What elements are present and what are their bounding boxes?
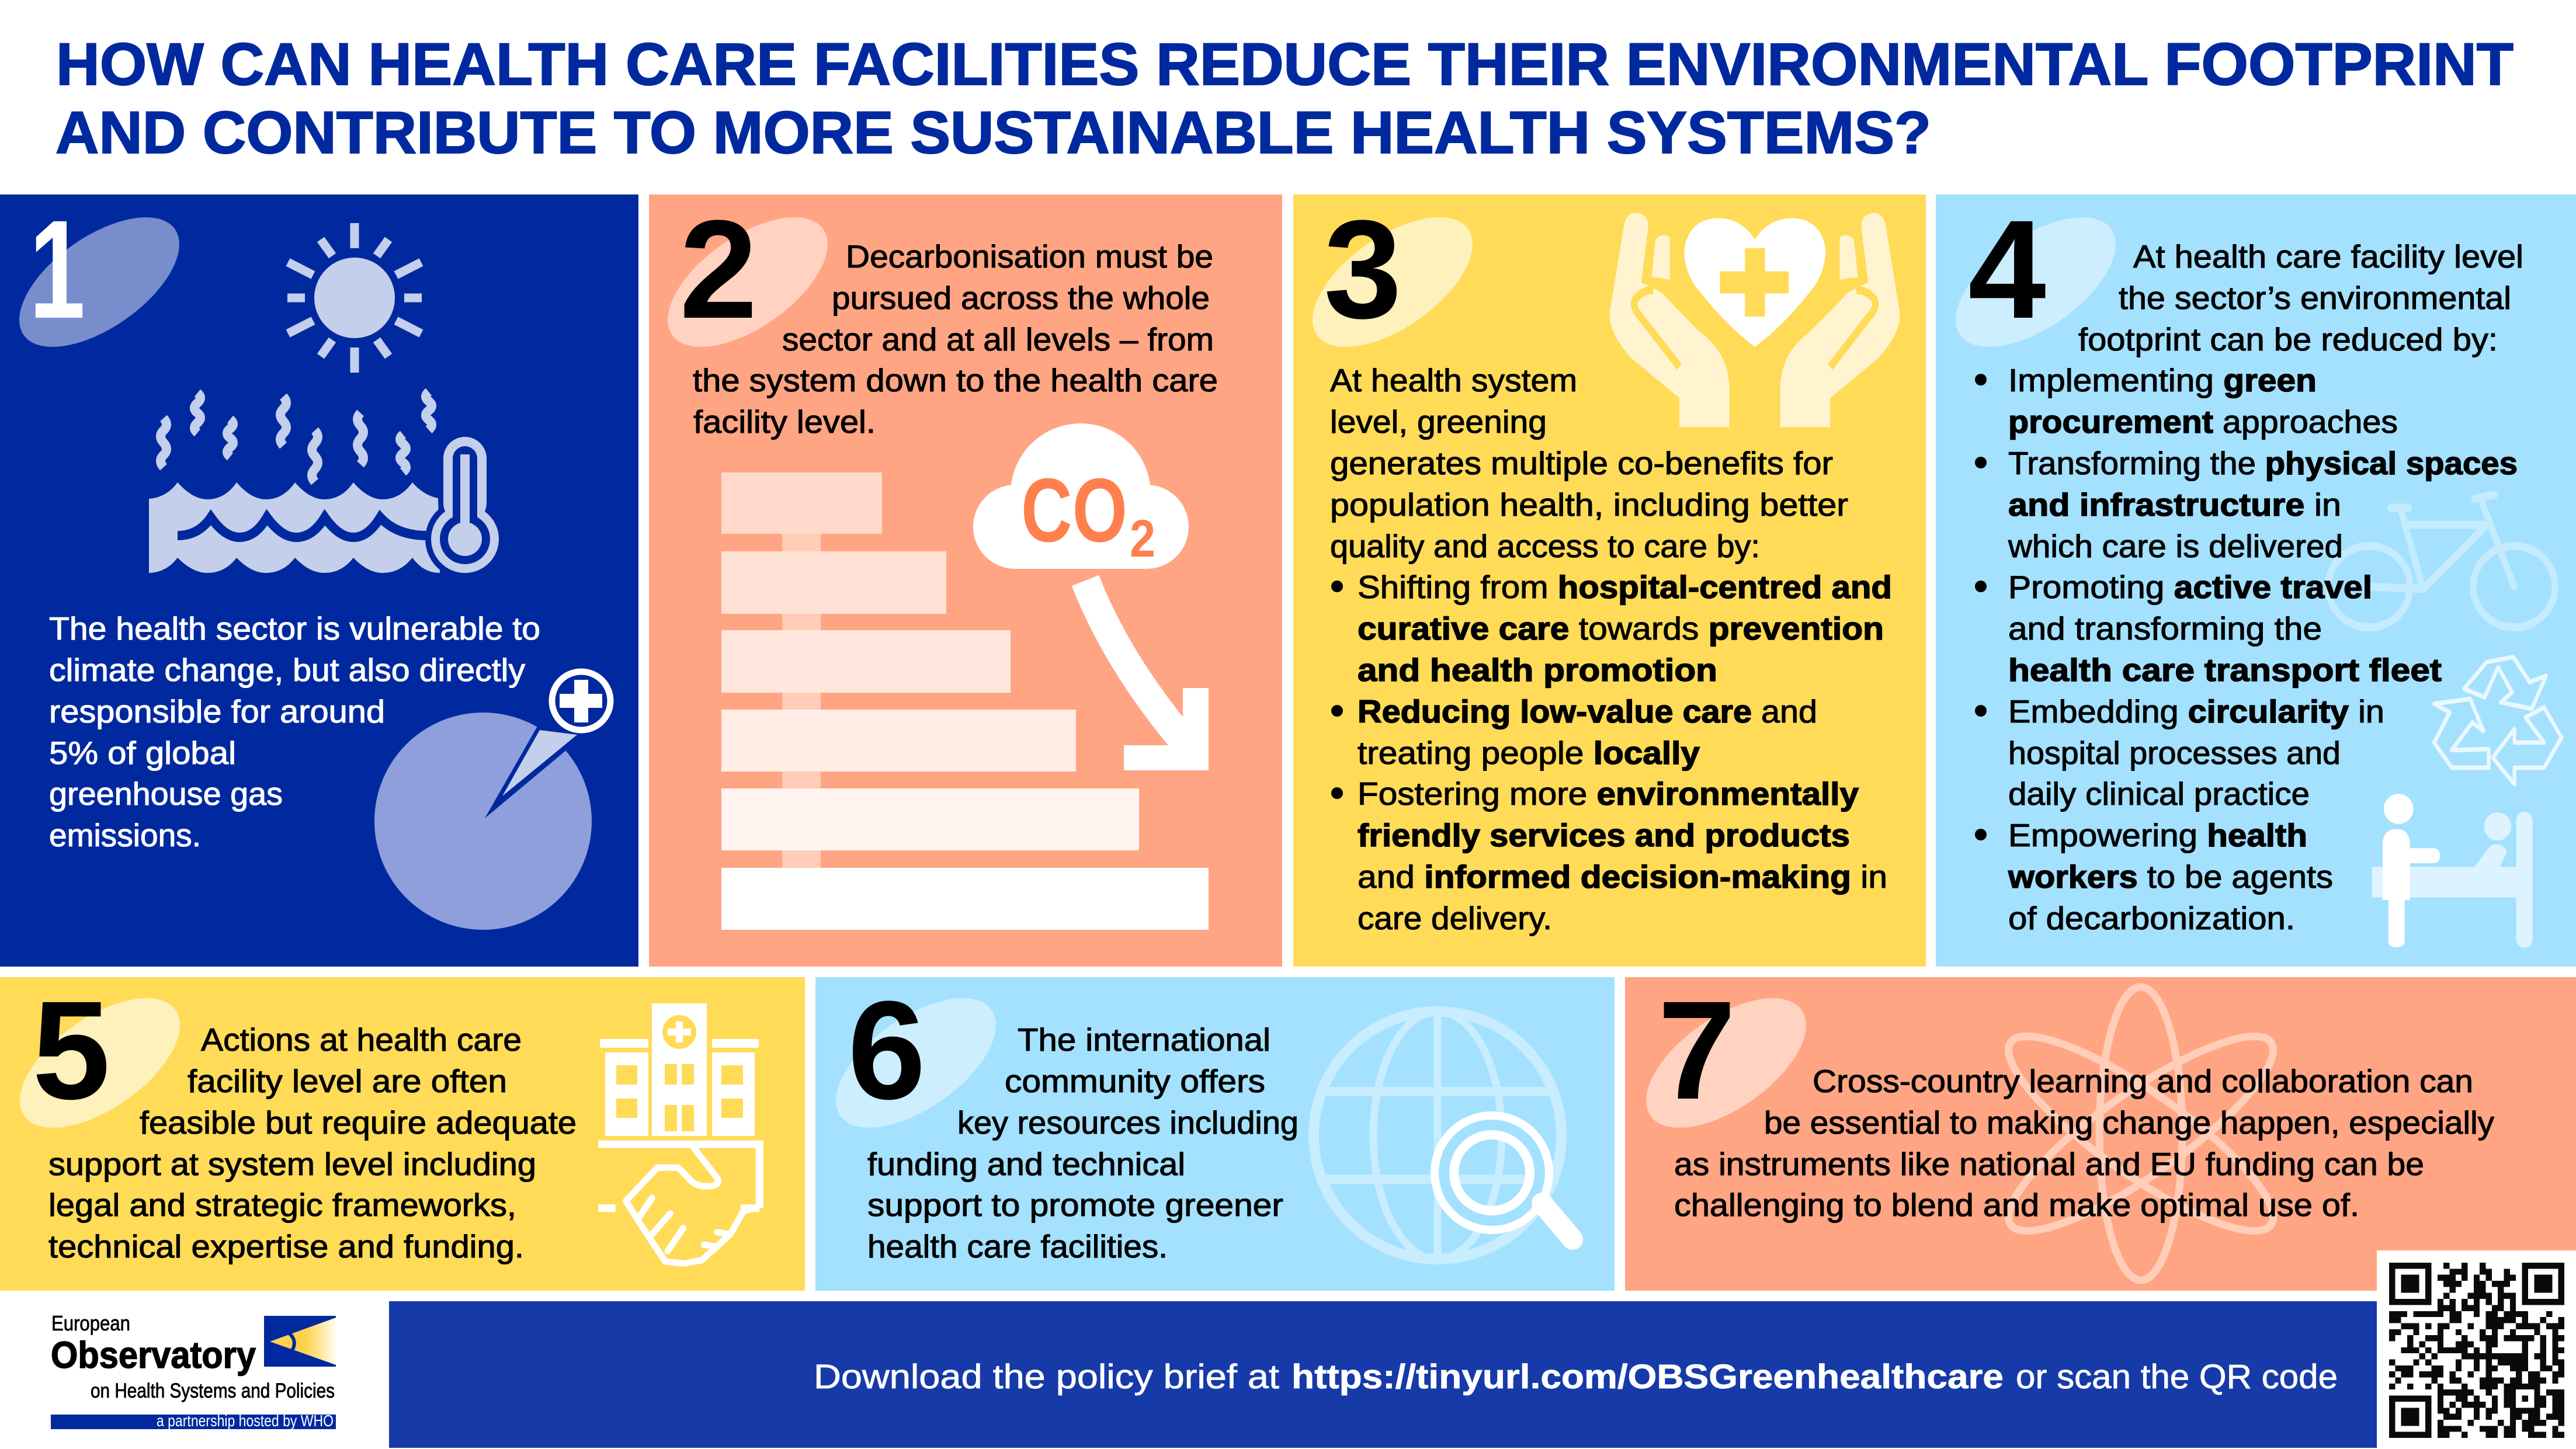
icon: hospital: [600, 1003, 759, 1136]
text: panel 4: daily clinical practice: [2008, 776, 2310, 812]
text: panel 3: Fostering more environmentally: [1358, 776, 1859, 812]
text: panel 3: At health system: [1330, 362, 1577, 398]
panel 5: system level support: [0, 972, 805, 1291]
text: panel 2: the system down to the health care: [693, 362, 1218, 398]
text: panel 5: legal and strategic frameworks,: [48, 1187, 516, 1223]
text: panel 3: Shifting from hospital-centred and: [1358, 569, 1892, 605]
text: panel 4: At health care facility level: [2133, 238, 2523, 274]
text: panel 4: the sector’s environmental: [2119, 280, 2511, 316]
footer bar: download call to action: Download the policy brief at: [814, 1358, 1279, 1396]
text: panel 5: facility level are often: [188, 1063, 507, 1099]
text: panel 2: facility level.: [693, 404, 876, 440]
icon: bicycle: [2328, 495, 2555, 627]
footer bar: download call to action: [389, 1301, 2377, 1448]
text: panel 3: level, greening: [1330, 404, 1547, 440]
icon: hands holding heart: [1610, 213, 1900, 428]
number 4: [1934, 191, 2137, 373]
text: panel 5: support at system level including: [48, 1146, 536, 1182]
text: panel 3: Reducing low-value care and: [1358, 693, 1817, 729]
text: panel 3: generates multiple co-benefits for: [1330, 445, 1833, 481]
logo: European Observatory: European: [51, 1311, 130, 1335]
title: AND CONTRIBUTE TO MORE SUSTAINABLE HEALTH SYSTEMS?: [55, 99, 1931, 166]
text: panel 1: 5% of global: [49, 735, 236, 771]
text: panel 4: of decarbonization.: [2008, 900, 2295, 936]
text: panel 6: The international: [1018, 1021, 1270, 1058]
panel 3: health system level: [1291, 191, 1926, 967]
number 1: [0, 191, 201, 373]
icon: health worker and patient bed: [2372, 794, 2533, 948]
title: [55, 31, 2513, 166]
icon: thermometer: [425, 437, 505, 579]
title: HOW CAN HEALTH CARE FACILITIES REDUCE THEIR ENVIRONMENTAL FOOTPRINT: [56, 31, 2513, 98]
text: panel 7: challenging to blend and make optimal use of.: [1674, 1187, 2359, 1223]
QR code: [2377, 1250, 2576, 1449]
icon: sun: [287, 223, 422, 373]
text: panel 4: procurement approaches: [2008, 404, 2398, 440]
text: panel 2: [693, 238, 1218, 440]
text: panel 5: Actions at health care: [201, 1021, 522, 1058]
text: panel 7: Cross-country learning and collaboration can: [1813, 1063, 2473, 1099]
icon: rising water and steam: [149, 392, 440, 573]
text: panel 4: and infrastructure in: [2008, 487, 2341, 523]
text: panel 5: technical expertise and funding.: [48, 1228, 524, 1264]
text: panel 1: responsible for around: [49, 693, 385, 729]
text: panel 4: hospital processes and: [2008, 735, 2341, 771]
icon: CO2 cloud: 2: [1130, 510, 1155, 568]
logo: European Observatory: a partnership hosted by WHO: [157, 1412, 334, 1430]
panel 6: international community: [814, 972, 1615, 1291]
text: panel 3: curative care towards prevention: [1358, 610, 1884, 647]
text: panel 1: [49, 610, 540, 853]
icon: atom: [1987, 987, 2295, 1280]
text: panel 4: and transforming the: [2008, 610, 2322, 647]
number 5: [0, 972, 202, 1153]
icon: magnifying glass: [1435, 1116, 1572, 1239]
number 7: 7: [1658, 972, 1736, 1128]
logo: European Observatory: [51, 1311, 336, 1430]
text: panel 3: friendly services and products: [1358, 817, 1850, 853]
number 3: 3: [1324, 191, 1402, 348]
logo: European Observatory: Observatory: [51, 1334, 256, 1376]
text: panel 1: emissions.: [49, 817, 201, 853]
text: panel 3: [1330, 362, 1892, 936]
panel 4: health care facility level: [1934, 191, 2576, 967]
text: panel 4: workers to be agents: [2008, 859, 2333, 895]
icon: logo eye mark: [264, 1316, 336, 1367]
text: panel 4: Implementing green: [2008, 362, 2317, 398]
text: panel 1: climate change, but also directly: [49, 652, 526, 688]
number 2: [646, 191, 849, 373]
text: panel 3: and informed decision-making in: [1358, 859, 1887, 895]
text: panel 4: health care transport fleet: [2008, 652, 2442, 688]
icon: recycling arrows: [2434, 657, 2561, 784]
text: panel 6: [867, 1021, 1299, 1264]
text: panel 4: footprint can be reduced by:: [2078, 321, 2498, 357]
text: panel 6: community offers: [1005, 1063, 1265, 1099]
text: panel 6: support to promote greener: [867, 1187, 1283, 1223]
text: panel 3: care delivery.: [1358, 900, 1552, 936]
text: panel 7: as instruments like national and EU funding can be: [1674, 1146, 2424, 1182]
number 4: 4: [1968, 191, 2046, 348]
number 1: 1: [29, 191, 85, 348]
number 5: 5: [32, 972, 110, 1128]
text: panel 4: which care is delivered: [2008, 528, 2343, 564]
number 6: 6: [848, 972, 926, 1128]
text: panel 3: population health, including better: [1330, 487, 1848, 523]
panel 7: cross-country learning: [1624, 972, 2576, 1291]
arrow: downward: [1085, 581, 1209, 770]
number 6: [814, 972, 1018, 1153]
text: panel 5: [48, 1021, 577, 1264]
text: panel 4: Embedding circularity in: [2008, 693, 2384, 729]
text: panel 5: feasible but require adequate: [140, 1104, 577, 1141]
icon: CO2 cloud: [973, 423, 1189, 569]
text: panel 3: and health promotion: [1358, 652, 1717, 688]
chart: descending emissions bars: [721, 472, 1209, 930]
text: panel 4: Empowering health: [2008, 817, 2307, 853]
text: panel 6: funding and technical: [867, 1146, 1185, 1182]
icon: globe: [1314, 1012, 1561, 1259]
icon: handshake: [598, 1144, 759, 1263]
number 3: [1291, 191, 1494, 373]
text: panel 1: greenhouse gas: [49, 776, 283, 812]
text: panel 1: The health sector is vulnerable to: [49, 610, 540, 647]
text: panel 6: health care facilities.: [867, 1228, 1168, 1264]
text: panel 3: treating people locally: [1358, 735, 1700, 771]
text: panel 4: Promoting active travel: [2008, 569, 2372, 605]
icon: five percent pie chart: [374, 672, 610, 930]
text: panel 2: Decarbonisation must be: [846, 238, 1213, 274]
footer bar: download call to action: or scan the QR code: [2016, 1358, 2338, 1396]
text: panel 2: sector and at all levels – from: [782, 321, 1214, 357]
text: panel 3: quality and access to care by:: [1330, 528, 1760, 564]
logo: European Observatory: on Health Systems and Policies: [91, 1379, 335, 1402]
text: panel 7: be essential to making change happen, especially: [1764, 1104, 2495, 1141]
panel 1: climate vulnerability: [0, 191, 638, 967]
text: panel 4: Transforming the physical spaces: [2008, 445, 2518, 481]
panel 2: decarbonisation: [646, 191, 1282, 967]
text: panel 2: pursued across the whole: [832, 280, 1210, 316]
footer bar: download call to action: https://tinyurl.com/OBSGreenhealthcare: [1292, 1358, 2004, 1396]
text: panel 4: [1975, 238, 2523, 936]
text: panel 7: [1674, 1063, 2495, 1223]
text: panel 6: key resources including: [957, 1104, 1299, 1141]
icon: CO2 cloud: CO: [1021, 460, 1127, 561]
number 7: [1624, 972, 1828, 1153]
number 2: 2: [679, 191, 758, 348]
